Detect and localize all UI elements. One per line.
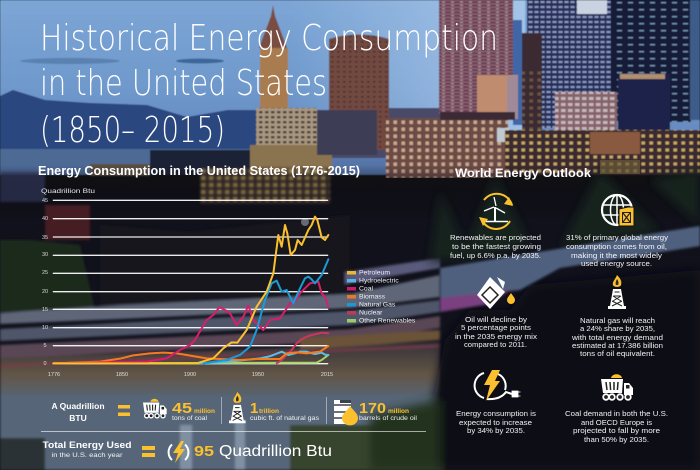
panel: quadrillion BTU equivalents xyxy=(41,392,426,432)
icon: oil barrel xyxy=(334,400,358,425)
legend: Biomass xyxy=(359,294,386,300)
text: natural gas share: estimated at 17.386 billion xyxy=(572,341,663,350)
legend xyxy=(347,270,416,324)
icon: lightning bolt xyxy=(169,441,188,463)
stat: 170 million barrels xyxy=(359,400,418,422)
text: natural gas share: with total energy demand xyxy=(571,333,663,342)
text: natural gas share: a 24% share by 2035, xyxy=(580,324,655,333)
axis title: Quadrillion Btu xyxy=(41,188,95,195)
y axis labels: 5 xyxy=(43,343,47,349)
text: oil share: 31% of primary global energy xyxy=(566,233,668,242)
stat: 170 million barrels: 170 xyxy=(359,400,386,417)
text: natural gas share: Natural gas will reach xyxy=(580,316,655,325)
series: natural gas xyxy=(203,259,328,363)
legend: Petroleum xyxy=(359,270,390,276)
text: oil decline: Oil will decline by xyxy=(465,315,527,324)
text: coal demand xyxy=(565,409,668,444)
panel: energy consumption line chart xyxy=(38,164,416,378)
y axis labels: 15 xyxy=(42,307,48,313)
x axis labels: 1950 xyxy=(252,372,264,378)
x axis labels: 1776 xyxy=(48,372,60,378)
text: coal demand: and OECD Europe is xyxy=(581,418,652,427)
label: a quadrillion BTU xyxy=(51,401,105,423)
series: other renewables xyxy=(53,355,328,363)
legend: Nuclear xyxy=(359,310,383,316)
stat: 1 trillion cubic ft: 1 xyxy=(250,400,258,417)
y axis labels: 30 xyxy=(42,252,48,258)
stat: 45 million tons of coal: 45 xyxy=(172,400,192,417)
y axis labels: 10 xyxy=(42,325,48,331)
y axis labels: 45 xyxy=(42,198,48,204)
chart heading: Energy Consumption in the United States (1776-2015) xyxy=(38,164,360,178)
label: total energy used xyxy=(42,440,132,459)
text: energy consumption xyxy=(456,409,536,435)
y axis labels: 35 xyxy=(42,235,48,241)
legend: Other Renewables xyxy=(359,318,416,324)
series: biomass xyxy=(53,346,328,363)
stat: 45 million tons of coal: million xyxy=(194,409,215,415)
text: natural gas share: tons of oil equivalent. xyxy=(580,349,655,358)
x axis labels xyxy=(48,372,333,378)
text: oil share: making it the most widely xyxy=(571,251,662,260)
label: a quadrillion BTU: A Quadrillion xyxy=(51,401,105,411)
stat: 45 million tons of coal xyxy=(172,400,215,422)
label: total energy used: Total Energy Used xyxy=(42,440,132,450)
y axis labels: 25 xyxy=(42,270,48,276)
legend: Natural Gas xyxy=(359,302,396,308)
series: nuclear xyxy=(277,333,328,363)
title: in the United States xyxy=(40,63,327,104)
stat: 95 quadrillion Btu: Quadrillion Btu xyxy=(219,443,332,460)
equals sign xyxy=(142,446,155,457)
legend: Hydroelectric xyxy=(359,278,399,284)
title xyxy=(40,18,498,151)
panel: total energy used xyxy=(42,440,332,463)
text: renewables: to be the fastest growing xyxy=(452,242,541,251)
series: petroleum xyxy=(53,217,328,363)
equals sign xyxy=(118,405,130,416)
icon: coal truck xyxy=(143,399,167,418)
stat: 170 million barrels: barrels of crude oil xyxy=(359,415,418,422)
y axis labels: 20 xyxy=(42,289,48,295)
text: oil decline: compared to 2011. xyxy=(464,340,527,349)
right highway band xyxy=(440,226,700,312)
y axis labels xyxy=(42,198,48,367)
text: renewables: fuel, up 6.6% p.a. by 2035. xyxy=(450,251,541,260)
icon: gas rig xyxy=(229,392,246,423)
lower dark section xyxy=(0,165,700,220)
text: oil share: used energy source. xyxy=(581,259,652,268)
text: renewables: Renewables are projected xyxy=(450,233,541,242)
icon: oil can with drop xyxy=(477,277,515,309)
stat: 1 trillion cubic ft xyxy=(250,400,320,422)
plot lines xyxy=(53,200,328,364)
text: oil share: consumption comes from oil, xyxy=(566,242,667,251)
x axis labels: 2015 xyxy=(321,372,333,378)
y axis labels: 0 xyxy=(43,361,47,367)
icon: wind turbine in recycling arrows xyxy=(479,194,513,229)
icon: coal truck xyxy=(601,374,633,400)
text: oil decline xyxy=(455,315,537,349)
icon: globe with fuel can xyxy=(602,195,634,226)
text: oil decline: in the 2035 energy mix xyxy=(455,332,537,341)
text: oil decline: 5 percentage points xyxy=(461,323,531,332)
text: oil share xyxy=(566,233,668,268)
title: Historical Energy Consumption xyxy=(40,18,498,59)
text: coal demand: Coal demand in both the U.S. xyxy=(565,409,668,418)
text: energy consumption: Energy consumption is xyxy=(456,409,536,418)
label: total energy used: in the U.S. each year xyxy=(52,452,123,459)
text: coal demand: than 50% by 2035. xyxy=(584,435,649,444)
text: renewables xyxy=(450,233,541,260)
panel: world energy outlook xyxy=(450,166,668,444)
heading: World Energy Outlook xyxy=(455,166,591,180)
highway bands xyxy=(0,275,440,324)
text: energy consumption: by 34% by 2035. xyxy=(467,426,525,435)
stat: 170 million barrels: million xyxy=(388,409,409,415)
legend: Coal xyxy=(359,286,373,292)
icon: natural gas rig xyxy=(608,275,626,309)
stat: 45 million tons of coal: tons of coal xyxy=(172,415,208,422)
y axis labels: 40 xyxy=(42,216,48,222)
text: coal demand: projected to fall by more xyxy=(573,426,660,435)
text: energy consumption: expected to increase xyxy=(459,418,532,427)
x axis labels: 1900 xyxy=(184,372,196,378)
series: hydroelectric xyxy=(200,352,328,363)
x axis labels: 1850 xyxy=(116,372,128,378)
stat: 1 trillion cubic ft: cubic ft. of natural gas xyxy=(250,415,320,422)
icon: bolt with plug xyxy=(475,370,520,401)
trees over the right side xyxy=(370,170,700,470)
label: a quadrillion BTU: BTU xyxy=(69,413,87,423)
series: coal xyxy=(53,282,328,363)
stat: 95 quadrillion Btu: 95 xyxy=(194,443,214,460)
stat: 1 trillion cubic ft: trillion xyxy=(259,409,279,415)
text: natural gas share xyxy=(571,316,663,358)
title: (1850– 2015) xyxy=(40,110,225,151)
